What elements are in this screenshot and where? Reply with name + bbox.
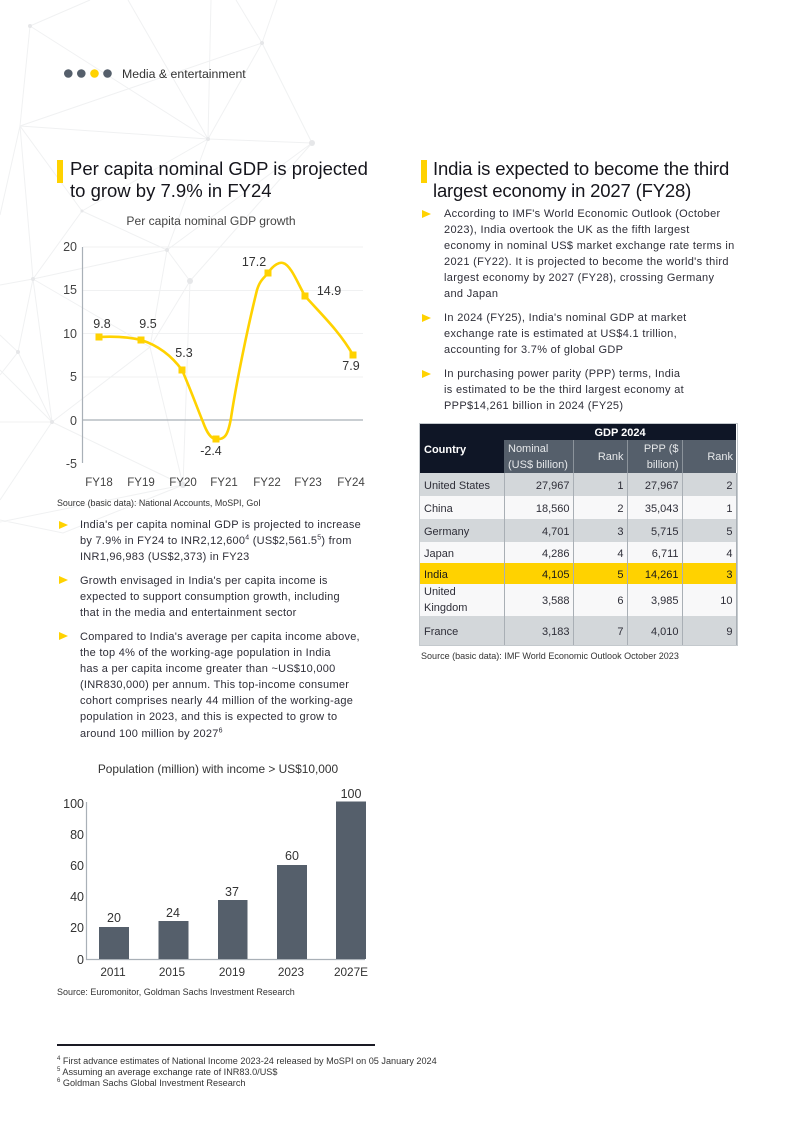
bullet list: per capita income: (INR830,000) per annum. This top-income consumer: [80, 679, 349, 691]
table: GDP 2024 by country: United States: [424, 480, 490, 492]
heading: third largest economy: [421, 158, 729, 201]
line chart: per capita nominal GDP growth: -5: [66, 457, 77, 471]
line chart: per capita nominal GDP growth: 9.8: [93, 317, 111, 331]
bullet list: per capita income: cohort comprises nearly 44 million of the working-age: [80, 695, 353, 707]
table: GDP 2024 by country: 4,701: [542, 526, 570, 538]
line chart: per capita nominal GDP growth: FY21: [210, 477, 238, 489]
table: GDP 2024 by country: billion): [647, 459, 678, 471]
bullet list: per capita income: INR1,96,983 (US$2,373) in FY23: [80, 551, 250, 563]
line chart: per capita nominal GDP growth: FY23: [294, 477, 322, 489]
table: GDP 2024 by country: Rank: [707, 451, 733, 463]
line chart: per capita nominal GDP growth: FY18: [85, 477, 113, 489]
bullet list: per capita income: the top 4% of the working-age population in India: [80, 647, 331, 659]
line chart: per capita nominal GDP growth: FY24: [337, 477, 365, 489]
line chart: per capita nominal GDP growth: 20: [63, 240, 77, 254]
bullet list: per capita income: has a per capita income greater than ~US$10,000: [80, 663, 335, 675]
table: GDP 2024 by country: Germany: [424, 526, 469, 538]
source: bar chart: Source: Euromonitor, Goldman Sachs Investment Research: [57, 987, 295, 997]
bar chart: population with income above US$10,000: 100: [341, 787, 361, 801]
table: GDP 2024 by country: France: [424, 626, 458, 638]
bullet list: per capita income: Growth envisaged in India's per capita income is: [80, 575, 328, 587]
bullet list: per capita income: around 100 million by 20276: [80, 727, 223, 740]
table: GDP 2024 by country: 3,588: [542, 595, 570, 607]
heading: per capita GDP: [57, 158, 368, 201]
table: GDP 2024 by country: Japan: [424, 548, 454, 560]
bullet list: per capita income: expected to support consumption growth, including: [80, 591, 340, 603]
footnotes: [57, 1044, 437, 1088]
table: GDP 2024 by country: 5: [617, 568, 624, 580]
bar chart: population with income above US$10,000: 20: [107, 911, 121, 925]
bullet list: India's economic rank: 2021 (FY22). It is projected to become the world's third: [444, 256, 729, 268]
table: GDP 2024 by country: 1: [726, 502, 733, 514]
table: GDP 2024 by country: 18,560: [536, 502, 570, 514]
bullet list: India's economic rank: In purchasing power parity (PPP) terms, India: [444, 368, 680, 380]
bullet list: India's economic rank: PPP$14,261 billion in 2024 (FY25): [444, 400, 623, 412]
table: GDP 2024 by country: 5: [726, 526, 733, 538]
line chart: per capita nominal GDP growth: 0: [70, 414, 77, 428]
bullet list: India's economic rank: is estimated to be the third largest economy at: [444, 384, 684, 396]
bullet list: per capita income: that in the media and entertainment sector: [80, 607, 297, 619]
table: GDP 2024 by country: [419, 423, 738, 646]
bullet list: India's economic rank: and Japan: [444, 288, 498, 300]
table: GDP 2024 by country: Nominal: [508, 443, 548, 455]
table: GDP 2024 by country: Rank: [598, 451, 624, 463]
table: GDP 2024 by country: 3: [617, 526, 624, 538]
heading: per capita GDP: to grow by 7.9% in FY24: [70, 180, 272, 201]
footnotes: 5 Assuming an average exchange rate of INR83.0/US$: [57, 1067, 277, 1077]
table: GDP 2024 by country: 6,711: [652, 548, 678, 560]
bullet list: India's economic rank: accounting for 3.7% of global GDP: [444, 344, 623, 356]
bar chart: population with income above US$10,000: 37: [225, 885, 239, 899]
table: GDP 2024 by country: Kingdom: [424, 602, 467, 614]
heading: third largest economy: largest economy in 2027 (FY28): [433, 180, 691, 201]
section marker: media and entertainment: Media & entertainment: [122, 67, 246, 81]
table: GDP 2024 by country: PPP ($: [644, 443, 678, 455]
table: GDP 2024 by country: 10: [720, 595, 733, 607]
line chart: per capita nominal GDP growth: [63, 214, 365, 489]
line chart: per capita nominal GDP growth: Per capita nominal GDP growth: [126, 214, 296, 228]
table: GDP 2024 by country: 14,261: [645, 568, 678, 580]
line chart: per capita nominal GDP growth: FY20: [169, 477, 197, 489]
line chart: per capita nominal GDP growth: FY19: [127, 477, 155, 489]
bar chart: population with income above US$10,000: 0: [77, 953, 84, 967]
footnotes: 6 Goldman Sachs Global Investment Research: [57, 1078, 245, 1088]
table: GDP 2024 by country: 3,183: [542, 626, 570, 638]
line chart: per capita nominal GDP growth: FY22: [253, 477, 281, 489]
bar chart: population with income above US$10,000: 100: [63, 797, 84, 811]
table: GDP 2024 by country: 2: [617, 502, 624, 514]
table: GDP 2024 by country: China: [424, 502, 453, 514]
table: GDP 2024 by country: 4,286: [542, 548, 570, 560]
footnotes: 4 First advance estimates of National Income 2023-24 released by MoSPI on 05 January 2024: [57, 1056, 437, 1066]
table: GDP 2024 by country: 9: [726, 626, 733, 638]
bullet list: India's economic rank: According to IMF's World Economic Outlook (October: [444, 208, 720, 220]
bullet list: per capita income: population in 2023, and this is expected to grow to: [80, 711, 337, 723]
bullet list: India's economic rank: largest economy by 2027 (FY28), crossing Germany: [444, 272, 714, 284]
table: GDP 2024 by country: India: [424, 568, 448, 580]
table: GDP 2024 by country: 5,715: [651, 526, 678, 538]
line chart: per capita nominal GDP growth: 9.5: [139, 317, 157, 331]
table: GDP 2024 by country: 35,043: [645, 502, 678, 514]
bar chart: population with income above US$10,000: 20: [70, 921, 84, 935]
bullet list: India's economic rank: [422, 208, 735, 412]
table: GDP 2024 by country: 7: [617, 626, 624, 638]
line chart: per capita nominal GDP growth: 14.9: [317, 284, 341, 298]
table: GDP 2024 by country: 2: [726, 480, 733, 492]
bullet list: per capita income: [59, 519, 361, 740]
table: GDP 2024 by country: 27,967: [645, 480, 678, 492]
bar chart: population with income above US$10,000: [63, 762, 368, 979]
table: GDP 2024 by country: 27,967: [536, 480, 570, 492]
table: GDP 2024 by country: 4,105: [542, 568, 570, 580]
table: GDP 2024 by country: 6: [617, 595, 624, 607]
line chart: per capita nominal GDP growth: 5.3: [175, 346, 193, 360]
table: GDP 2024 by country: 3,985: [651, 595, 678, 607]
source: table: Source (basic data): IMF World Economic Outlook October 2023: [421, 651, 679, 661]
bar chart: population with income above US$10,000: 2015: [159, 965, 186, 979]
bar chart: population with income above US$10,000: 60: [70, 859, 84, 873]
section marker: media and entertainment: [64, 67, 246, 81]
bullet list: India's economic rank: 2023), India overtook the UK as the fifth largest: [444, 224, 690, 236]
table: GDP 2024 by country: GDP 2024: [594, 427, 646, 439]
heading: per capita GDP: Per capita nominal GDP is projected: [70, 158, 368, 179]
bar chart: population with income above US$10,000: Population (million) with income > US$10,000: [98, 762, 339, 776]
bullet list: per capita income: India's per capita nominal GDP is projected to increase: [80, 519, 361, 531]
bullet list: India's economic rank: In 2024 (FY25), India's nominal GDP at market: [444, 312, 687, 324]
bar chart: population with income above US$10,000: 60: [285, 849, 299, 863]
table: GDP 2024 by country: 4: [726, 548, 733, 560]
bullet list: India's economic rank: economy in nominal US$ market exchange rate terms in: [444, 240, 735, 252]
table: GDP 2024 by country: Country: [424, 444, 466, 456]
table: GDP 2024 by country: (US$ billion): [508, 459, 568, 471]
line chart: per capita nominal GDP growth: 15: [63, 283, 77, 297]
heading: third largest economy: India is expected to become the third: [433, 158, 729, 179]
line chart: per capita nominal GDP growth: 10: [63, 327, 77, 341]
table: GDP 2024 by country: 3: [726, 568, 733, 580]
source: line chart: Source (basic data): National Accounts, MoSPI, GoI: [57, 498, 261, 508]
table: GDP 2024 by country: 4,010: [651, 626, 678, 638]
bar chart: population with income above US$10,000: 24: [166, 906, 180, 920]
table: GDP 2024 by country: 4: [617, 548, 624, 560]
bullet list: per capita income: by 7.9% in FY24 to INR2,12,6004 (US$2,561.55) from: [80, 534, 352, 547]
line chart: per capita nominal GDP growth: 7.9: [342, 359, 360, 373]
bar chart: population with income above US$10,000: 2011: [100, 965, 126, 979]
background network pattern: [0, 0, 315, 534]
table: GDP 2024 by country: United: [424, 586, 456, 598]
line chart: per capita nominal GDP growth: 17.2: [242, 255, 266, 269]
bar chart: population with income above US$10,000: 2023: [278, 965, 305, 979]
line chart: per capita nominal GDP growth: -2.4: [200, 444, 222, 458]
line chart: per capita nominal GDP growth: 5: [70, 370, 77, 384]
bar chart: population with income above US$10,000: 2027E: [334, 965, 368, 979]
bar chart: population with income above US$10,000: 40: [70, 890, 84, 904]
table: GDP 2024 by country: 1: [617, 480, 624, 492]
bullet list: India's economic rank: exchange rate is estimated at US$4.1 trillion,: [444, 328, 677, 340]
bullet list: per capita income: Compared to India's average per capita income above,: [80, 631, 360, 643]
bar chart: population with income above US$10,000: 80: [70, 828, 84, 842]
bar chart: population with income above US$10,000: 2019: [219, 965, 245, 979]
